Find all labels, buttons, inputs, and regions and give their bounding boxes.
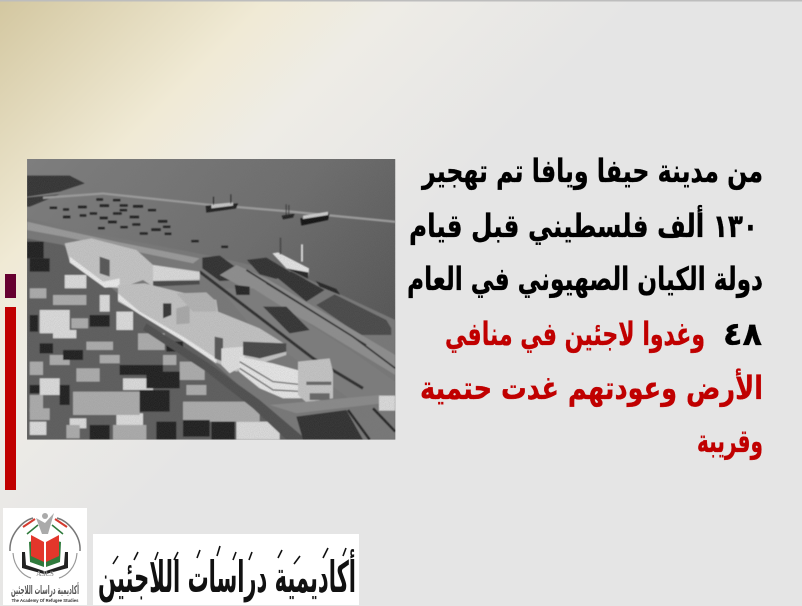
logo: academy emblem: أكاديمية دراسات اللاجئين <box>11 582 79 597</box>
headland <box>27 176 85 197</box>
shore strip <box>27 222 200 263</box>
grain <box>27 159 395 440</box>
bottom right yard <box>270 395 395 440</box>
tug at quay <box>316 281 340 295</box>
streamline corner building <box>239 357 333 402</box>
arabic paragraph <box>407 152 763 460</box>
line 2: ١٣٠ ألف فلسطيني قبل قيام <box>409 205 758 245</box>
ship: right steamer <box>300 212 330 226</box>
line 4 number: ٤٨ <box>723 315 762 353</box>
logo: academy emblem <box>3 508 87 605</box>
quay road <box>220 265 395 375</box>
land <box>27 218 395 440</box>
long warehouse <box>316 294 391 335</box>
emblem arcs <box>10 518 80 551</box>
ship: left steamer <box>206 194 238 213</box>
accent bars <box>5 274 16 490</box>
line 6 red: وقريبة <box>697 422 763 460</box>
emblem initials: A.R.S <box>36 570 54 578</box>
sea <box>27 159 395 440</box>
harbour photograph <box>27 159 395 440</box>
liner at quay <box>272 238 309 279</box>
dark cargo yard <box>263 307 310 333</box>
banner calligraphic ticks <box>113 546 346 564</box>
modern buildings row <box>65 238 286 373</box>
main road <box>143 323 306 440</box>
ship: sailing vessel <box>282 204 295 219</box>
emblem english name: The Academy Of Refugee Studies <box>12 598 79 603</box>
emblem book <box>29 540 44 567</box>
emblem figure <box>42 513 48 519</box>
city blocks <box>27 238 300 440</box>
railway yard <box>200 270 395 388</box>
moored boats <box>50 198 228 248</box>
warehouses <box>202 256 325 302</box>
breakwater <box>43 192 395 223</box>
logo: calligraphy banner <box>93 534 359 605</box>
banner lettering: أكاديمية دراسات اللاجئين <box>98 549 356 602</box>
